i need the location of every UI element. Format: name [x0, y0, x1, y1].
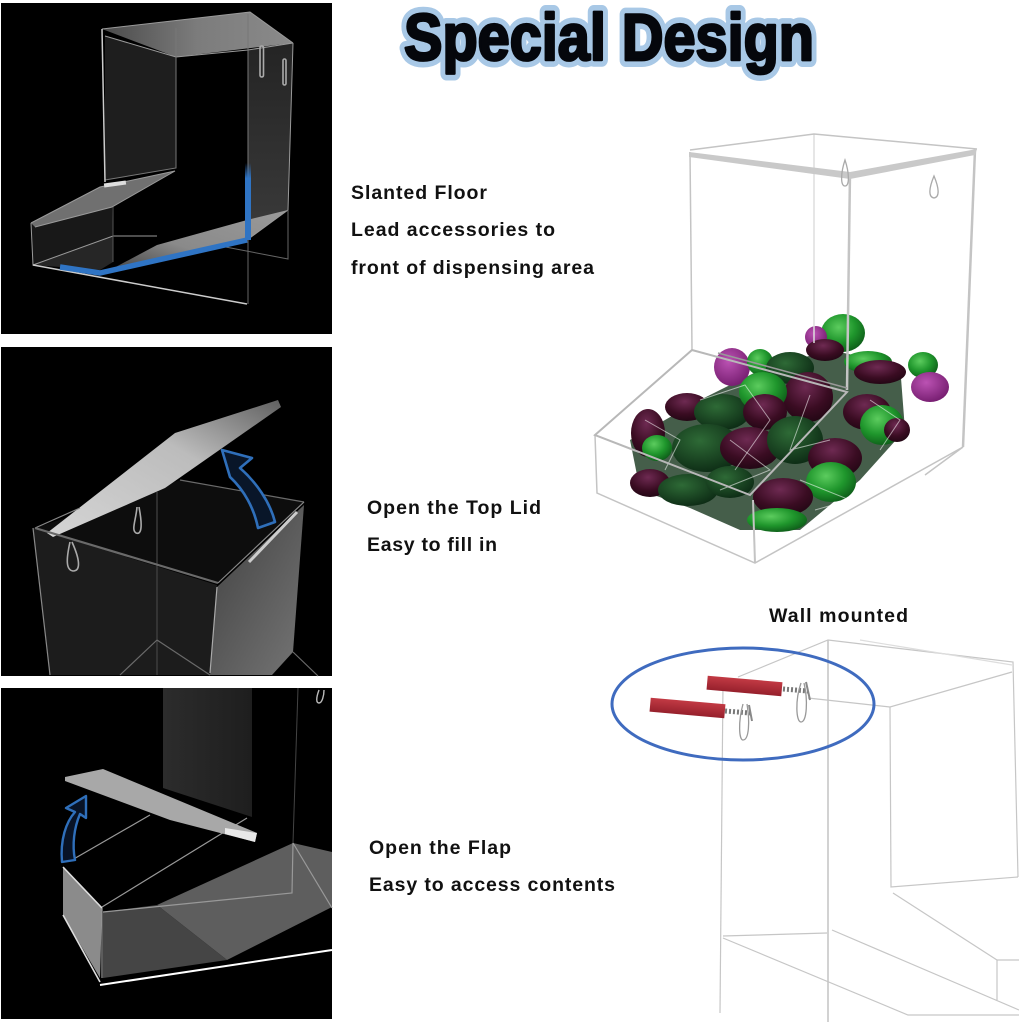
tower left inner wall [105, 36, 176, 180]
blue arrow: flap [62, 796, 86, 862]
right face [210, 505, 304, 675]
callout: blue ellipse [612, 648, 874, 760]
title: Special Design [404, 0, 814, 74]
bin side face [63, 867, 102, 978]
text block: top lid: Open the Top Lid [367, 497, 541, 519]
acrylic outline [595, 134, 977, 563]
text block: flap: Easy to access contents [369, 874, 615, 896]
blue floor highlight [60, 240, 247, 273]
left face [33, 528, 217, 675]
diagram: wall mounted dispenser outline [720, 640, 1019, 1022]
opened flap [65, 769, 257, 842]
keyhole slots [260, 46, 286, 85]
dark tower [163, 688, 252, 817]
tower left edge [102, 29, 105, 182]
blue arrow: lid [222, 450, 275, 528]
tower right wall [248, 43, 293, 235]
rim front edge [35, 528, 218, 583]
keyholes [67, 507, 141, 571]
flap handle [104, 180, 126, 188]
text block: slanted floor: front of dispensing area [351, 257, 594, 279]
text block: top lid [367, 497, 541, 556]
keyholes [842, 160, 938, 198]
text block: flap [369, 837, 615, 896]
icon: wall anchor lower [650, 698, 752, 740]
icon: wall anchor upper [707, 676, 810, 722]
tower edge [293, 688, 298, 843]
text block: top lid: Easy to fill in [367, 534, 497, 556]
panel: open flap photo [1, 688, 332, 1019]
slanted floor [110, 210, 288, 270]
bottom white edges [100, 950, 332, 985]
bin front face [103, 905, 227, 978]
flap latch [225, 828, 257, 842]
label: wall mounted: Wall mounted [769, 605, 908, 627]
slanted floor inside bin [157, 843, 332, 960]
hook [317, 690, 324, 703]
panel: slanted floor photo [1, 3, 332, 334]
back interior [35, 480, 304, 583]
bottom edge [33, 265, 247, 304]
text block: slanted floor: Lead accessories to [351, 219, 555, 241]
top rim [689, 149, 977, 179]
opened lid [47, 400, 281, 537]
top lid [102, 12, 293, 57]
dispensing flap [31, 171, 175, 227]
product photo: dispenser with pods [595, 134, 977, 563]
plastic wrap lines [645, 385, 900, 510]
dispensing bin front face [31, 207, 113, 265]
text block: slanted floor [351, 182, 594, 279]
panel: open top lid photo [1, 347, 332, 676]
text block: slanted floor: Slanted Floor [351, 182, 487, 204]
title: Special Design [404, 0, 814, 74]
rim highlight [249, 512, 297, 562]
text block: flap: Open the Flap [369, 837, 511, 859]
laundry pods [630, 314, 949, 532]
